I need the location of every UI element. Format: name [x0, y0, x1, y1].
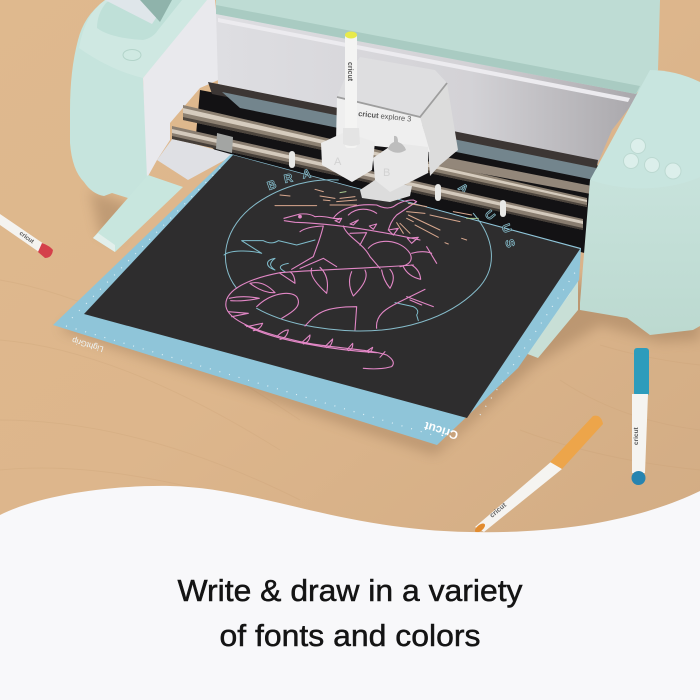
- rod clamp: [216, 133, 233, 153]
- machine right body: [580, 70, 700, 335]
- curved lettering: S: [502, 238, 518, 249]
- mat brand label: Cricut: [423, 419, 460, 443]
- drawing on paper: [224, 166, 518, 369]
- blue marker: cricut: [633, 426, 640, 445]
- peach sun rays: [275, 189, 478, 244]
- machine and mat shadow: [60, 190, 700, 455]
- curved lettering: U: [482, 207, 498, 223]
- mat side guide right: [525, 278, 578, 358]
- machine top lid: [216, 0, 660, 94]
- curved lettering: A: [301, 166, 312, 182]
- teal circle: [225, 180, 491, 331]
- teal details: [224, 240, 418, 321]
- curved lettering: [265, 166, 518, 249]
- headline: [178, 573, 523, 653]
- control buttons: [624, 138, 681, 179]
- white wave panel: [0, 486, 700, 700]
- front rod: [172, 126, 583, 230]
- red marker: cricut: [18, 231, 35, 245]
- machine back wall: [216, 10, 640, 165]
- orange marker: cricut: [489, 501, 508, 520]
- dark rail slot: [196, 90, 600, 255]
- blue cutting mat: [53, 154, 581, 445]
- tool in cup: [105, 0, 168, 24]
- blue marker: [632, 348, 649, 485]
- accessory cup: [97, 0, 182, 40]
- tool carriage: [321, 57, 458, 202]
- pink dinosaur: [226, 200, 437, 369]
- orange marker: [473, 416, 603, 534]
- mat label: LightGrip: [70, 335, 105, 354]
- curved lettering: U: [499, 222, 515, 235]
- platform under rollers: [157, 138, 234, 180]
- white side panel: [143, 0, 223, 178]
- tool carriage: B: [383, 167, 390, 179]
- curved lettering: R: [283, 171, 294, 186]
- black paper: [84, 155, 580, 418]
- yellow marker in carriage: cricut: [346, 62, 353, 82]
- rod clip bands: [289, 151, 506, 217]
- rear rod: [183, 105, 592, 207]
- mat side guide left: [93, 175, 183, 252]
- red marker: [0, 214, 53, 258]
- wooden table background: [0, 0, 700, 560]
- brand text on carriage: cricut explore 3: [358, 109, 412, 124]
- curved lettering: B: [265, 177, 278, 193]
- clamp letters: A: [334, 156, 342, 168]
- headline: Write & draw in a variety: [178, 573, 523, 608]
- curved lettering: A: [455, 180, 471, 197]
- power button: [123, 50, 141, 60]
- yellow marker in carriage: [343, 32, 360, 148]
- mat ruler ticks: [66, 162, 578, 436]
- machine left body: [70, 0, 223, 198]
- headline: of fonts and colors: [220, 618, 480, 653]
